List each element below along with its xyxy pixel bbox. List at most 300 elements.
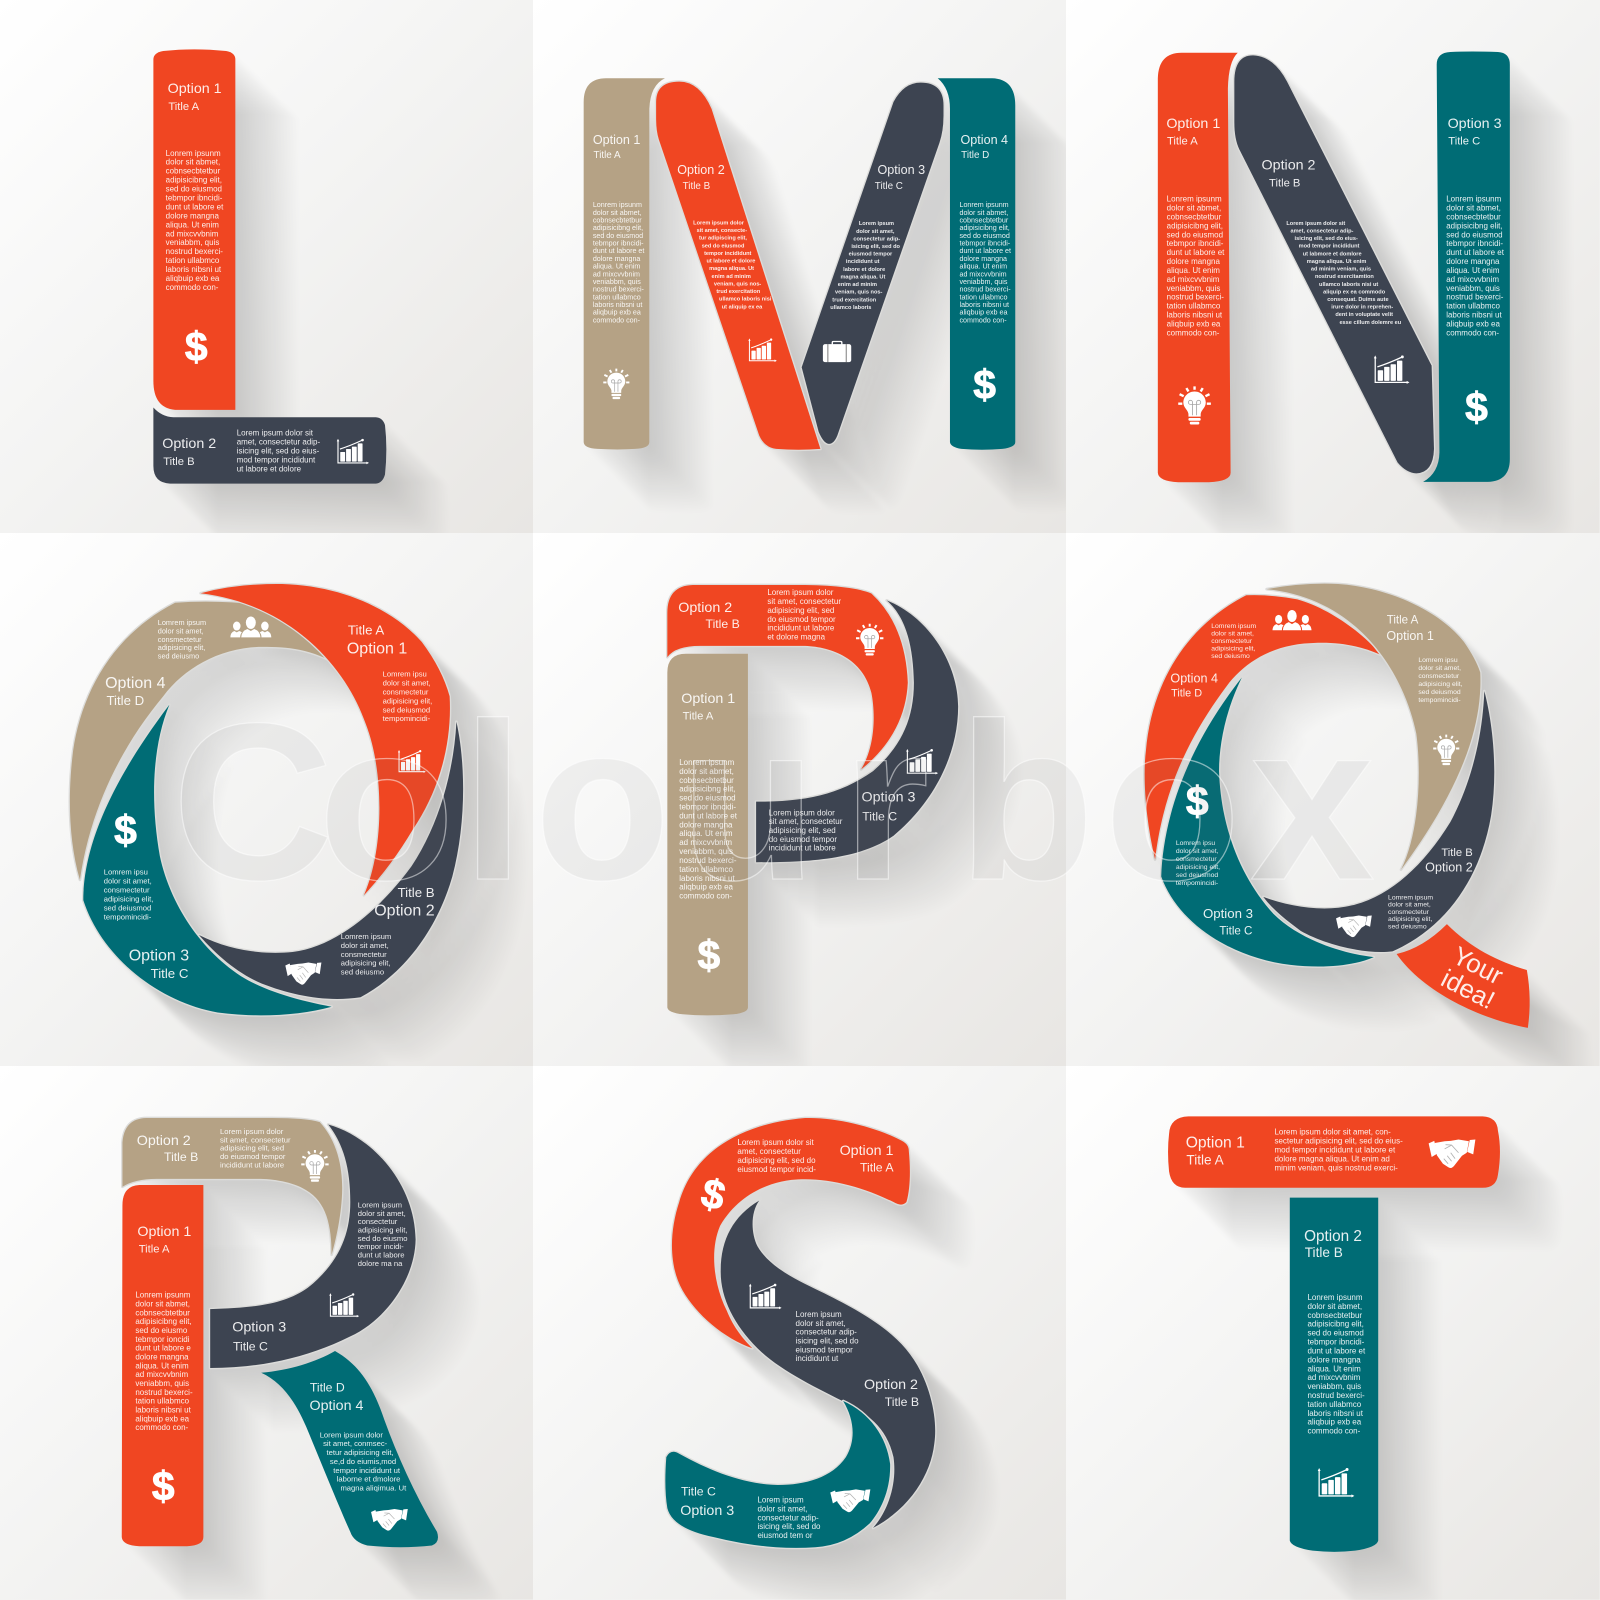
ribbon: Option 1 Title A: Option 1	[1386, 629, 1434, 643]
ribbon: Option 1 Title A: Option 1	[840, 1143, 894, 1159]
ribbon: Option 4 Title D: Lorem ipsum dolor	[320, 1430, 383, 1439]
ribbon: Option 3 Title C: dolor sit amet,	[757, 1505, 808, 1514]
ribbon: Your idea tail	[1397, 924, 1530, 1028]
ribbon: Your idea tail: idea!	[1436, 965, 1499, 1015]
ribbon: Option 2 Title B: dolor sit amet,	[796, 1319, 846, 1328]
ribbon: Option 2 Title B: Option 2	[864, 1377, 918, 1393]
ribbon: Option 2 Title B: Title B	[1305, 1245, 1343, 1260]
ribbon: Option 2 Title B: Title B	[885, 1395, 919, 1409]
ribbon: Option 2 Title B: aliqua. Ut enim	[1307, 1364, 1361, 1373]
ribbon: Option 1 Title A: dolor sit amet,	[383, 678, 431, 687]
ribbon: Option 2 Title B	[1290, 1198, 1378, 1552]
ribbon: Option 1 Title A: Option 1	[1166, 116, 1220, 132]
ribbon: Option 4 Title D: Title D	[106, 693, 144, 708]
ribbon: Option 3 Title C: sit amet, consectetur	[769, 817, 843, 826]
ribbon: Option 1 Title A: cobnsecbtetbur	[1167, 213, 1222, 222]
ribbon: Option 1 Title A: Option 1	[593, 133, 640, 147]
ribbon: Option 1 Title A: tebmpor ioncidi	[135, 1335, 190, 1344]
panel: letter R	[0, 1066, 534, 1600]
ribbon: Option 3 Title C: veniabbm, quis	[1446, 284, 1500, 293]
ribbon: Option 3 Title C: Option 3	[878, 163, 925, 177]
ribbon: Option 4 Title D	[938, 78, 1015, 450]
ribbon: Option 3 Title C: Lorem ipsum	[358, 1200, 402, 1209]
ribbon: Option 3 Title C: magna aliqua. Ut	[840, 274, 885, 280]
ribbon: Option 3 Title C: dolore mangna	[1446, 257, 1500, 266]
ribbon: Option 3 Title C: ad mixcvvbnim	[1446, 275, 1499, 284]
ribbon: Option 3 Title C: tebmpor ibncidi-	[1446, 239, 1503, 248]
ribbon: Option 2 Title B: Title B	[706, 617, 740, 631]
ribbon: Option 1 Title A: Title A	[1186, 1153, 1225, 1168]
ribbon: Option 1 Title A: Option 1	[1186, 1135, 1245, 1152]
ribbon: Option 4 Title D: veniabbm, quis	[959, 278, 1008, 286]
ribbon: Option 1 Title A: Lonrem ipsunm	[1167, 195, 1222, 204]
ribbon: Option 3 Title C: Title C	[1219, 925, 1252, 937]
ribbon: Option 2 Title B: magna aliqua. Ut	[709, 266, 754, 272]
ribbon: Option 3 Title C: tempomincidi-	[1176, 880, 1218, 887]
ribbon: Option 2 Title B	[721, 1201, 935, 1528]
ribbon: Option 1 Title A: dunt ut labore et	[593, 247, 644, 255]
ribbon: Option 4 Title D: sit amet, conmsec-	[323, 1439, 388, 1448]
panel: letter O	[0, 533, 534, 1067]
ribbon: Option 2 Title B: commodo con-	[1307, 1427, 1361, 1436]
ribbon: Option 2 Title B: Lorem ipsum dolor	[767, 588, 834, 597]
ribbon: Option 1 Title A: aliqua. Ut enim	[1167, 266, 1220, 275]
ribbon: Option 1 Title A: tempomincidi-	[1418, 697, 1461, 704]
ribbon: Option 2 Title B: Lorem ipsum dolor sit	[1286, 221, 1345, 227]
ribbon: Option 2 Title B	[1234, 55, 1434, 473]
ribbon: Option 4 Title D: laboris nibsni ut	[959, 301, 1009, 309]
ribbon: Option 1 Title A: Option 1	[347, 640, 407, 657]
ribbon: Option 1 Title A: amet, consectetur	[737, 1147, 801, 1156]
ribbon: Option 1 Title A: cobnsecbtetbur	[593, 216, 642, 224]
ribbon: Option 1 Title A: dolor sit abmet,	[593, 209, 642, 217]
ribbon: Option 3 Title C: labore et dolore	[843, 267, 885, 273]
ribbon: Option 1 Title A: nostrud bexerci-	[166, 247, 223, 256]
ribbon: Option 2 Title B: Lorem ipsum	[796, 1310, 842, 1319]
ribbon: Option 2 Title B: sit amet, consectetur	[767, 597, 841, 606]
ribbon: Option 1 Title A: veniabbm, quis	[166, 238, 219, 247]
ribbon: Option 3 Title C: sed deiusmod	[1176, 872, 1218, 879]
ribbon: Option 2 Title B: Lorem ipsum dolor	[693, 220, 745, 226]
ribbon: Option 2 Title B: nostrud exercitamtion	[1315, 274, 1374, 280]
ribbon: Option 1 Title A: adipisicibng elit,	[1167, 221, 1223, 230]
ribbon: Option 2 Title B: Option 2	[374, 903, 435, 920]
ribbon: Option 2 Title B: adipisicing elit, sed	[220, 1144, 284, 1153]
ribbon: Option 4 Title D	[70, 602, 337, 880]
ribbon: Option 3 Title C	[665, 1401, 890, 1548]
ribbon: Option 4 Title D: cobnsecbtetbur	[959, 216, 1009, 224]
panel: letter M	[533, 0, 1067, 534]
ribbon: Option 1 Title A: Title A	[594, 150, 621, 161]
ribbon: Option 4 Title D: Lomrem ipsum	[158, 618, 206, 627]
ribbon: Option 1 Title A: aliqua. Ut enim	[135, 1361, 189, 1370]
ribbon: Option 4 Title D: se,d do eiumis,mod	[330, 1457, 396, 1466]
ribbon: Option 2 Title B: consmectetur	[1388, 909, 1430, 916]
ribbon: Option 3 Title C: $	[114, 807, 137, 853]
ribbon: Option 1 Title A: sectetur adipisicing elit, sed do eius-	[1274, 1137, 1403, 1146]
ribbon: Option 2 Title B: isicing elit, sed do eius-	[1295, 236, 1358, 242]
ribbon: Option 1 Title A: tation ullabmco	[166, 256, 220, 265]
ribbon: Option 4 Title D: sed deiusmo	[158, 651, 199, 660]
ribbon: Option 1 Title A: tebmpor ibncidi-	[1167, 239, 1224, 248]
ribbon: Option 1 Title A	[584, 78, 665, 449]
ribbon: Option 4 Title D: tation ullabmco	[959, 293, 1007, 301]
ribbon: Option 1 Title A: tempomincidi-	[383, 714, 431, 723]
ribbon: Option 4 Title D: sed do eiusmod	[959, 232, 1010, 240]
ribbon: Option 2 Title B: consectetur adip-	[796, 1328, 857, 1337]
ribbon: Option 2 Title B: consmectetur	[341, 950, 387, 959]
ribbon: Option 3 Title C: consectetur	[358, 1217, 398, 1226]
ribbon: Option 2 Title B: sed deiusmo	[1388, 923, 1427, 930]
ribbon: Option 1 Title A	[153, 49, 235, 410]
ribbon: Option 3 Title C: consmectetur	[1176, 856, 1217, 863]
ribbon: Option 1 Title A: dunt ut labore et	[1167, 248, 1225, 257]
ribbon: Option 2 Title B: tempor incididunt	[704, 251, 752, 257]
ribbon: Option 2 Title B: Title B	[1269, 177, 1300, 189]
ribbon: Option 4 Title D: adipisicing elit,	[158, 643, 205, 652]
ribbon: Option 3 Title C	[802, 83, 944, 444]
ribbon: Option 3 Title C: isicing elit, sed do	[851, 244, 901, 250]
ribbon: Option 1 Title A: tation ullabmco	[135, 1397, 190, 1406]
ribbon: Option 1 Title A: dolor sit abmet,	[1167, 204, 1221, 213]
ribbon: Option 1 Title A: adipisicibng elit,	[679, 785, 736, 794]
ribbon: Option 1 Title A: tebmpor ibncidi-	[679, 803, 736, 812]
ribbon: Option 3 Title C: adipisicibng elit,	[1446, 221, 1503, 230]
ribbon: Option 1 Title A	[1158, 53, 1238, 482]
ribbon: Option 2 Title B	[199, 722, 463, 999]
ribbon: Option 4 Title D: dolor sit abmet,	[959, 209, 1008, 217]
ribbon: Option 3 Title C: ullamco laboris	[830, 305, 871, 311]
ribbon: Option 1 Title A: $	[185, 324, 208, 370]
ribbon: Option 1 Title A: Lomrem ipsu	[1418, 657, 1458, 664]
ribbon: Option 1 Title A: Lorem ipsum dolor sit	[737, 1138, 815, 1147]
ribbon: Option 3 Title C: Title C	[875, 181, 903, 192]
ribbon: Option 3 Title C: trud exercitation	[832, 297, 877, 303]
ribbon: Option 3 Title C: isicing elit, sed do	[757, 1522, 821, 1531]
ribbon: Option 1 Title A: tation ullabmco	[593, 293, 641, 301]
ribbon: Option 3 Title C: laboris nibsni ut	[1446, 311, 1502, 320]
ribbon: Option 3 Title C: incididunt ut labore	[769, 844, 836, 853]
ribbon: Option 2 Title B: trud exercitation	[716, 289, 761, 295]
ribbon: Option 1 Title A: Option 1	[168, 81, 222, 97]
ribbon: Option 1 Title A: Title A	[1387, 614, 1419, 626]
ribbon: Option 1 Title A	[667, 654, 748, 1015]
ribbon: Option 1 Title A: sed deiusmod	[383, 705, 430, 714]
ribbon: Option 2 Title B: sed do eiusmod	[1307, 1329, 1364, 1338]
ribbon: Option 3 Title C	[83, 705, 332, 1015]
ribbon: Option 4 Title D: dolor sit amet,	[1211, 631, 1254, 638]
ribbon: Option 1 Title A: dunt ut labore e	[135, 1344, 191, 1353]
ribbon: Option 1 Title A: dolor sit abmet,	[135, 1299, 190, 1308]
ribbon: Option 3 Title C: nostrud bexerci-	[1446, 293, 1504, 302]
ribbon: Option 1 Title A: dolor sit amet,	[1418, 665, 1461, 672]
ribbon: Option 3 Title C: $	[1465, 384, 1488, 430]
ribbon: Option 3 Title C: dolor sit amet,	[856, 229, 895, 235]
ribbon: Option 3 Title C: sed deiusmod	[104, 904, 151, 913]
ribbon: Option 1 Title A	[122, 1185, 203, 1546]
ribbon: Option 1 Title A: Title A	[683, 710, 714, 722]
ribbon: Option 1 Title A: veniabbm, quis	[135, 1379, 189, 1388]
ribbon: Option 3 Title C	[756, 600, 958, 862]
ribbon: Option 1 Title A: aliqua. Ut enim	[593, 263, 640, 271]
ribbon: Option 2 Title B	[667, 585, 908, 769]
ribbon: Option 2 Title B: adipisicing elit,	[1388, 916, 1432, 923]
ribbon: Option 4 Title D: $	[973, 362, 996, 408]
ribbon: Option 2 Title B: ut aliquip ex ea	[722, 304, 763, 310]
ribbon: Option 4 Title D: Lomrem ipsum	[1211, 623, 1257, 630]
ribbon: Option 1 Title A: dolore mangna	[593, 255, 640, 263]
ribbon: Option 2 Title B: enim ad minim	[712, 274, 751, 280]
ribbon: Option 3 Title C	[1161, 678, 1374, 967]
ribbon: Option 2 Title B: nostrud bexerci-	[1307, 1391, 1365, 1400]
ribbon: Option 1 Title A: dunt ut labore et	[166, 202, 224, 211]
ribbon: Option 2 Title B: sed deiusmo	[341, 967, 384, 976]
ribbon: Option 2 Title B: Title B	[1441, 847, 1473, 859]
ribbon: Option 3 Title C: Option 3	[680, 1503, 734, 1519]
ribbon: Option 2 Title B: eiusmod tempor	[796, 1345, 853, 1354]
ribbon: Option 1 Title A: Lonrem ipsunm	[166, 149, 221, 158]
ribbon: Option 2 Title B: dent in voluptate velit	[1335, 312, 1393, 318]
ribbon: Option 2 Title B: amet, consectetur adip-	[1290, 228, 1354, 234]
ribbon: Option 1 Title A: eiusmod tempor incid-	[737, 1165, 816, 1174]
ribbon: Your idea tail: Your	[1448, 942, 1507, 991]
ribbon: Option 1 Title A: commodo con-	[135, 1423, 189, 1432]
ribbon: Option 3 Title C: Option 3	[1448, 116, 1502, 132]
ribbon: Option 1 Title A: dolore magna aliqua. Ut enim ad	[1274, 1154, 1390, 1163]
ribbon: Option 1 Title A: Title A	[860, 1160, 894, 1174]
ribbon: Option 3 Title C: adipisicing elit, sed	[769, 826, 836, 835]
ribbon: Option 3 Title C: tempomincidi-	[104, 913, 152, 922]
ribbon: Option 3 Title C: Lomrem ipsu	[1176, 840, 1215, 847]
ribbon: Option 3 Title C: sed do eiusmod	[1446, 230, 1503, 239]
ribbon: Option 1 Title A: dolore mangna	[1167, 257, 1220, 266]
ribbon: Option 1 Title A: adipisicibng elit,	[135, 1317, 192, 1326]
ribbon: Option 1 Title A: tation ullabmco	[679, 865, 734, 874]
ribbon: Option 2 Title B: adipisicing elit,	[341, 959, 390, 968]
ribbon: Option 2 Title B: incididunt ut labore	[220, 1160, 284, 1169]
ribbon: Option 1 Title A: adipisicing elit,	[1418, 681, 1463, 688]
ribbon: Option 1 Title A: aliqbuip exb ea	[166, 274, 220, 283]
ribbon: Option 2 Title B: Title B	[164, 1150, 198, 1164]
ribbon: Option 2 Title B: Title B	[398, 885, 435, 900]
ribbon: Option 4 Title D: Option 4	[309, 1398, 363, 1414]
ribbon: Option 2 Title B: aliquip ex ea commodo	[1323, 289, 1386, 295]
ribbon: Option 1 Title A	[1267, 584, 1480, 870]
ribbon: Option 3 Title C: commodo con-	[1446, 328, 1499, 337]
ribbon: Option 3 Title C: eiusmod tem or	[757, 1531, 813, 1540]
ribbon: Option 3 Title C: consmectetur	[104, 885, 150, 894]
ribbon: Option 4 Title D: sed deiusmo	[1211, 653, 1250, 660]
ribbon: Option 1 Title A: ad mixcvvbnim	[1167, 275, 1220, 284]
ribbon: Option 1 Title A: laboris nibsni ut	[166, 265, 222, 274]
ribbon: Option 3 Title C: dunt ut labore et	[1446, 248, 1505, 257]
ribbon: Option 1 Title A: veniabbm, quis	[593, 278, 641, 286]
ribbon: Option 4 Title D	[261, 1351, 438, 1547]
ribbon: Option 1 Title A: $	[697, 932, 720, 978]
ribbon: Option 2 Title B	[656, 82, 820, 450]
ribbon: Option 4 Title D: aliqbuip exb ea	[959, 309, 1007, 317]
ribbon: Option 1 Title A: dolor sit abmet,	[166, 158, 220, 167]
ribbon: Option 3 Title C: Title C	[681, 1485, 716, 1499]
ribbon: Option 2 Title B: Title B	[163, 456, 195, 468]
ribbon: Option 1 Title A: Option 1	[137, 1224, 191, 1240]
ribbon: Option 3 Title C: Title C	[233, 1340, 268, 1354]
ribbon: Option 3 Title C: dolor sit amet,	[1176, 848, 1219, 855]
ribbon: Option 1 Title A: aliqbuip exb ea	[135, 1414, 190, 1423]
ribbon: Option 2 Title B: isicing elit, sed do	[796, 1337, 859, 1346]
ribbon: Option 2 Title B: laboris nibsni ut	[1307, 1409, 1364, 1418]
ribbon: Option 3 Title C: Title C	[1448, 136, 1480, 148]
ribbon: Option 2 Title B: tebmpor ibncidi-	[1307, 1338, 1365, 1347]
ribbon: Option 1 Title A: adipisicing elit, sed do	[737, 1156, 816, 1165]
ribbon: Option 2 Title B: sit amet, consecte-	[697, 228, 747, 234]
ribbon: Option 2 Title B: consequat. Duims aute	[1327, 297, 1389, 303]
ribbon: Option 2 Title B: ullamco laboris nisi	[719, 297, 772, 303]
panel: letter T	[1066, 1066, 1600, 1600]
ribbon: Option 1 Title A: Title A	[168, 101, 200, 113]
ribbon: Option 2 Title B: adipisicibng elit,	[1307, 1320, 1364, 1329]
ribbon: Option 1 Title A: tation ullabmco	[1167, 302, 1221, 311]
ribbon: Option 3 Title C: Lorem ipsum	[859, 221, 894, 227]
ribbon: Option 3 Title C: aliqbuip exb ea	[1446, 319, 1501, 328]
ribbon: Option 2 Title B: dunt ut labore et	[1307, 1346, 1366, 1355]
ribbon: Option 1 Title A: laboris nibsni ut	[135, 1406, 192, 1415]
ribbon: Option 2 Title B: amet, consectetur adip-	[237, 438, 320, 447]
ribbon: Option 1 Title A: mod tempor incididunt ut labore et	[1274, 1146, 1396, 1155]
ribbon: Option 1 Title A	[201, 584, 450, 895]
ribbon: Option 2 Title B	[153, 407, 386, 484]
ribbon: Option 2 Title B: esse cillum dolemre eu	[1339, 320, 1402, 326]
ribbon: Option 3 Title C: adipisicing elit,	[358, 1225, 407, 1234]
ribbon: Option 1 Title A: cobnsecbtetbur	[135, 1308, 190, 1317]
ribbon: Option 2 Title B: mod tempor incididunt	[1299, 244, 1360, 250]
ribbon: Option 2 Title B: Option 2	[137, 1133, 191, 1149]
ribbon: Option 1 Title A: ad mixcvvbnim	[593, 270, 640, 278]
ribbon: Option 2 Title B: ullamco laboris nisi ut	[1319, 282, 1378, 288]
ribbon: Option 1 Title A: consmectetur	[1418, 673, 1460, 680]
panel: letter N	[1066, 0, 1600, 534]
ribbon: Option 4 Title D: commodo con-	[959, 316, 1007, 324]
ribbon: Option 1 Title A: sed do eiusmod	[166, 185, 222, 194]
ribbon: Option 2 Title B: Lorem ipsum dolor sit	[237, 429, 314, 438]
ribbon: Option 1 Title A: adipisicibng elit,	[166, 176, 222, 185]
ribbon: Option 2 Title B: Lorem ipsum dolor	[220, 1127, 284, 1136]
ribbon: Option 1 Title A: commodo con-	[166, 283, 219, 292]
ribbon: Option 1 Title A: tebmpor ibncidi-	[166, 193, 223, 202]
ribbon: Option 1 Title A: $	[697, 1169, 730, 1219]
ribbon: Option 1 Title A: commodo con-	[593, 316, 641, 324]
ribbon: Option 1 Title A: ad mixcvvbnim	[135, 1370, 189, 1379]
ribbon: Option 2 Title B: ad minim veniam, quis	[1311, 267, 1371, 273]
ribbon: Option 3 Title C: adipisicing elit,	[1176, 864, 1220, 871]
ribbon: Option 3 Title C: aliqua. Ut enim	[1446, 266, 1500, 275]
ribbon: Option 1 Title A: aliqbuip exb ea	[679, 883, 734, 892]
ribbon: Option 3 Title C: do eiusmod tempor	[769, 835, 837, 844]
ribbon: Option 1 Title A: laboris nibsni ut	[679, 874, 736, 883]
ribbon: Option 3 Title C: Lorem ipsum	[757, 1496, 804, 1505]
ribbon: Option 2 Title B: dolore mangna	[1307, 1355, 1361, 1364]
ribbon: Option 1 Title A: $	[152, 1463, 175, 1509]
ribbon: Option 4 Title D: aliqua. Ut enim	[959, 263, 1007, 271]
ribbon: Option 2 Title B: Lomrem ipsum	[341, 932, 391, 941]
ribbon: Option 4 Title D: tempor incididunt ut	[333, 1466, 401, 1475]
ribbon: Option 3 Title C: Title C	[151, 966, 189, 981]
ribbon: Option 1 Title A: nostrud bexerci-	[679, 856, 737, 865]
ribbon: Option 2 Title B: dolor sit amet,	[1388, 902, 1431, 909]
ribbon: Option 4 Title D: Option 4	[1170, 671, 1218, 685]
ribbon: Option 2 Title B: et dolore magna	[767, 632, 826, 641]
panel: letter P	[533, 533, 1067, 1067]
ribbon: Option 2 Title B: tation ullabmco	[1307, 1400, 1362, 1409]
ribbon: Option 3 Title C: sed do eiusmo	[358, 1234, 407, 1243]
ribbon: Option 3 Title C: eiusmod tempor	[849, 252, 893, 258]
ribbon: Option 3 Title C: incididunt ut	[846, 259, 880, 265]
ribbon: Option 4 Title D: Lonrem ipsunm	[959, 201, 1009, 209]
ribbon: Option 3 Title C: Lorem ipsum dolor	[769, 808, 835, 817]
ribbon: Option 4 Title D: laborne et dmolore	[337, 1475, 400, 1484]
ribbon: Option 3 Title C: consectetur adip-	[853, 236, 900, 242]
panel: letter L	[0, 0, 534, 534]
ribbon: Option 1 Title A: Lorem ipsum dolor sit amet, con-	[1274, 1128, 1391, 1137]
ribbon: Option 4 Title D: Title D	[961, 150, 989, 161]
ribbon: Option 4 Title D: dunt ut labore et	[959, 247, 1011, 255]
ribbon: Option 4 Title D: ad mixcvvbnim	[959, 270, 1007, 278]
ribbon: Option 2 Title B: tur adipiscing elit,	[699, 236, 747, 242]
ribbon: Option 3 Title C	[210, 1124, 416, 1368]
ribbon: Option 1 Title A: cobnsecbtetbur	[679, 776, 734, 785]
ribbon: Option 3 Title C: Lomrem ipsu	[104, 867, 148, 876]
ribbon: Option 3 Title C: Option 3	[862, 790, 916, 806]
ribbon: Option 1 Title A: cobnsecbtetbur	[166, 167, 221, 176]
ribbon: Option 1 Title A: commodo con-	[679, 892, 732, 901]
ribbon: Option 2 Title B: dolor sit amet,	[341, 941, 389, 950]
ribbon: Option 3 Title C: adipisicing elit,	[104, 894, 153, 903]
ribbon: Option 1 Title A: Option 1	[681, 691, 735, 707]
ribbon: Option 2 Title B: Option 2	[678, 600, 732, 616]
ribbon: Option 1 Title A: aliqua. Ut enim	[166, 220, 219, 229]
ribbon: Option 2 Title B: sit amet, consectetur	[220, 1135, 291, 1144]
ribbon: Option 2 Title B: Option 2	[1425, 860, 1473, 874]
ribbon: Option 1 Title A: veniabbm, quis	[679, 847, 733, 856]
ribbon: Option 3 Title C: Option 3	[1203, 906, 1253, 921]
ribbon: Option 2 Title B	[122, 1118, 342, 1255]
ribbon: Option 2 Title B: Option 2	[1262, 157, 1316, 173]
ribbon: Option 2 Title B: Option 2	[1304, 1228, 1362, 1245]
ribbon: Option 4 Title D: tebmpor ibncidi-	[959, 240, 1011, 248]
ribbon: Option 4 Title D: Title D	[1171, 688, 1202, 700]
ribbon: Option 2 Title B: veniam, quis nos-	[714, 281, 761, 287]
ribbon: Option 4 Title D: consmectetur	[158, 635, 202, 644]
ribbon: Option 1 Title A	[672, 1118, 910, 1348]
ribbon: Option 1 Title A: tebmpor ibncidi-	[593, 240, 644, 248]
ribbon: Option 2 Title B: Title B	[683, 181, 711, 192]
ribbon: Option 2 Title B: ut labmore et domlore	[1303, 251, 1362, 257]
ribbon: Option 1 Title A: sed do eiusmod	[679, 794, 736, 803]
ribbon: Option 2 Title B: magna aliqua. Ut enim	[1307, 259, 1366, 265]
ribbon: Option 3 Title C: tempor incidi-	[358, 1242, 404, 1251]
ribbon: Option 1 Title A: consmectetur	[383, 687, 429, 696]
ribbon: Option 2 Title B: Lomrem ipsum	[1388, 894, 1433, 901]
ribbon: Option 3 Title C: dolor sit abmet,	[1446, 204, 1501, 213]
ribbon: Option 4 Title D: Title D	[310, 1380, 345, 1394]
ribbon: Option 1 Title A: laboris nibsni ut	[593, 301, 642, 309]
ribbon: Option 3 Title C: Option 3	[129, 948, 189, 965]
ribbon: Option 4 Title D: adipisicibng elit,	[959, 224, 1010, 232]
ribbon: Option 1 Title A: nostrud bexerci-	[1167, 293, 1224, 302]
ribbon: Option 2 Title B: ut labore et dolore	[237, 464, 302, 473]
ribbon: Option 1 Title A: Title A	[1167, 136, 1198, 148]
watermark: Colourbox: Colourbox	[172, 677, 1375, 927]
